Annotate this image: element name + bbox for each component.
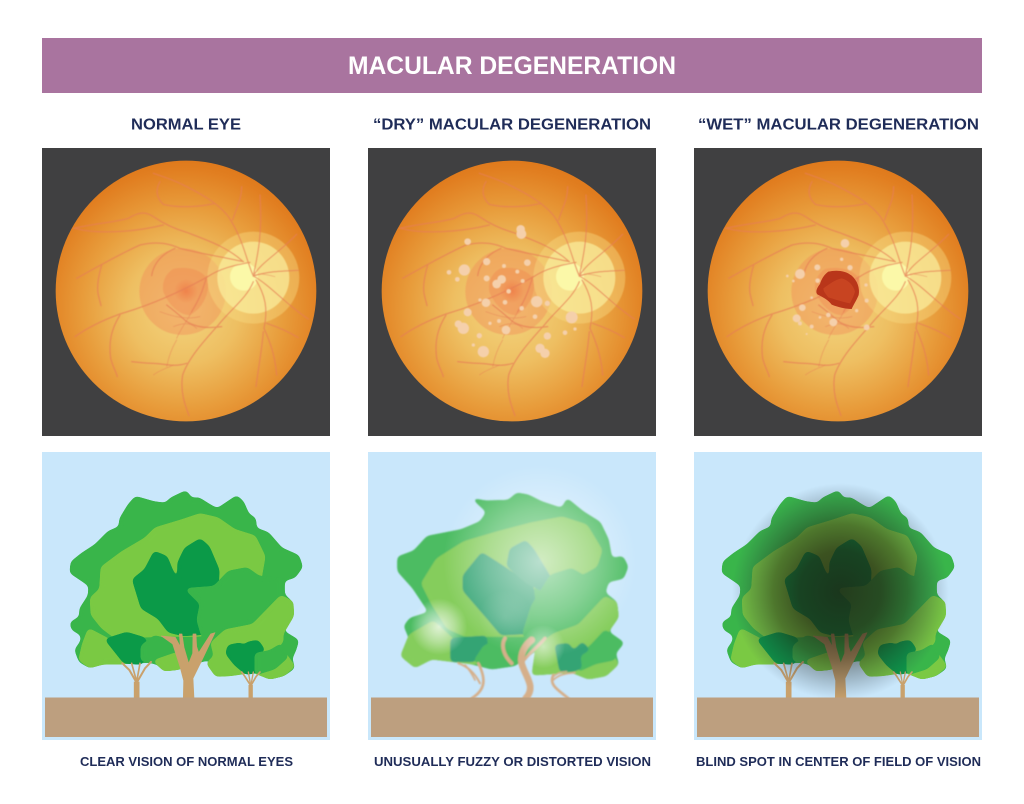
panel: dry retina with drusen [368, 148, 656, 436]
heading: normal eye: NORMAL EYE [131, 116, 241, 134]
distorted tree group [397, 465, 637, 698]
ground [371, 698, 653, 737]
drusen deposits [447, 225, 578, 358]
tree group [724, 493, 953, 698]
heading: wet macular degeneration: “WET” MACULAR DEGENERATION [698, 116, 979, 134]
caption: wet: BLIND SPOT IN CENTER OF FIELD OF VISION [696, 754, 981, 769]
tree group [72, 493, 301, 698]
ground [45, 698, 327, 737]
hemorrhage [816, 271, 859, 309]
white distortion glows [411, 465, 637, 668]
panel: clear vision scene [42, 452, 330, 740]
title banner [42, 38, 982, 93]
panel: normal retina [42, 148, 330, 436]
panel: blind spot scene [694, 452, 982, 740]
blind spot shading [694, 452, 980, 699]
exudate spots [786, 239, 870, 335]
panel: wet retina with hemorrhage [694, 148, 982, 436]
panel: distorted vision scene [368, 452, 656, 740]
ground [697, 698, 979, 737]
heading: dry macular degeneration: “DRY” MACULAR DEGENERATION [373, 116, 651, 134]
title banner: MACULAR DEGENERATION [348, 52, 676, 80]
caption: normal: CLEAR VISION OF NORMAL EYES [80, 754, 293, 769]
caption: dry: UNUSUALLY FUZZY OR DISTORTED VISION [374, 754, 651, 769]
